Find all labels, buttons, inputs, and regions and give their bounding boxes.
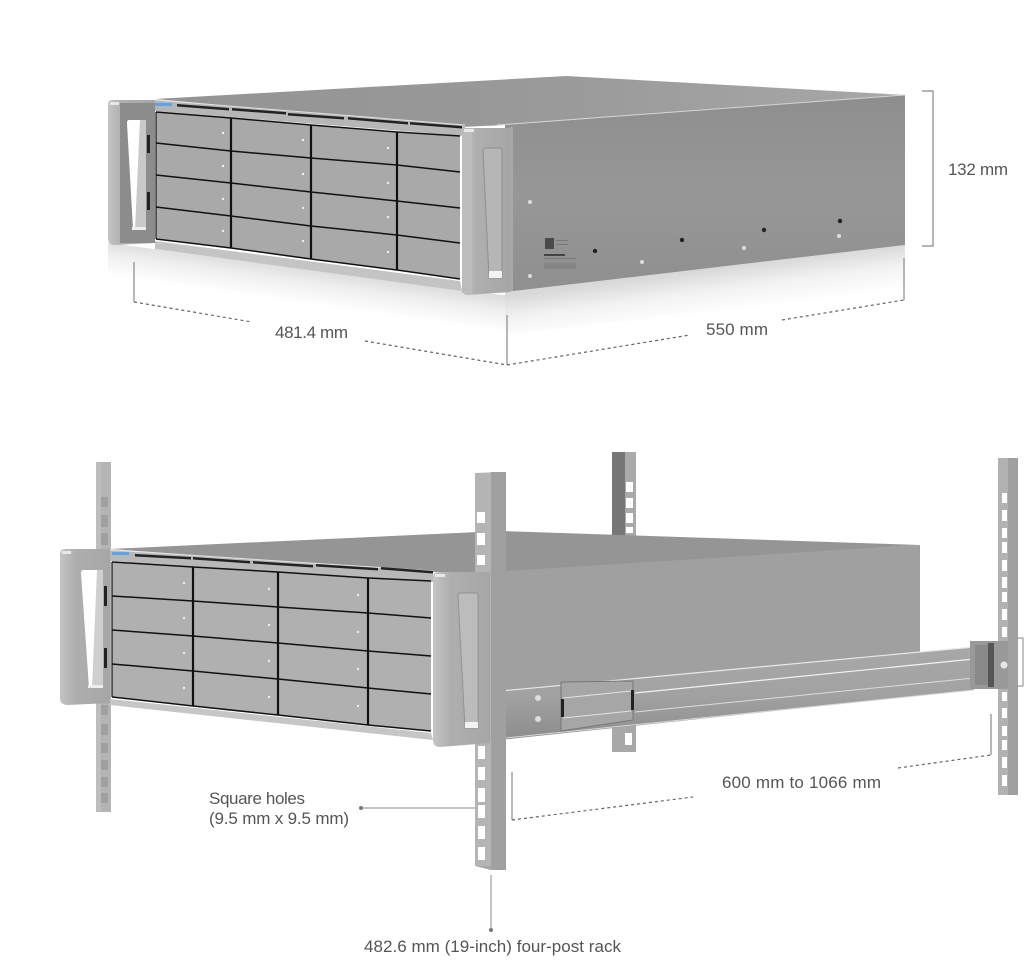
dimension: rail range bbox=[512, 714, 991, 820]
label: 600 mm to 1066 mm: 600 mm to 1066 mm bbox=[722, 773, 881, 792]
label: rack type: 482.6 mm (19-inch) four-post rack bbox=[364, 937, 622, 956]
left handle ear bbox=[60, 549, 110, 705]
right handle ear bbox=[462, 127, 513, 295]
label: 550 mm: 550 mm bbox=[706, 320, 768, 339]
right rear post bbox=[998, 458, 1018, 795]
side screws and ports bbox=[528, 200, 842, 278]
rear left post bbox=[96, 462, 111, 812]
top face bbox=[155, 76, 905, 127]
rail assembly bbox=[490, 647, 974, 741]
bottom front lip bbox=[155, 241, 462, 291]
label: square holes: Square holes bbox=[209, 789, 305, 808]
side face bbox=[490, 545, 920, 700]
rear centre post bbox=[612, 452, 636, 752]
vent strip bbox=[110, 550, 433, 582]
label: 481.4 mm: 481.4 mm bbox=[275, 323, 348, 342]
top edge highlight bbox=[497, 95, 905, 125]
label: 132 mm: 132 mm bbox=[948, 160, 1008, 179]
callout: square holes bbox=[209, 789, 475, 828]
regulatory label bbox=[544, 238, 576, 269]
drive bays bbox=[112, 562, 431, 731]
server: top view with dimensions bbox=[108, 76, 905, 335]
rear post stub with holes bbox=[612, 725, 636, 752]
slider carriage bbox=[561, 681, 633, 731]
dimension: height bbox=[922, 91, 1008, 246]
side face bbox=[505, 95, 905, 292]
floor reflection: side bbox=[505, 245, 905, 335]
rear rail bracket bbox=[970, 638, 1023, 689]
front right post bbox=[475, 472, 506, 870]
label: hole size: (9.5 mm x 9.5 mm) bbox=[209, 809, 349, 828]
dimension: width bbox=[134, 262, 507, 365]
drive bays bbox=[156, 112, 460, 279]
top face bbox=[110, 531, 920, 572]
right handle ear bbox=[433, 572, 490, 747]
callout: rack width bbox=[364, 875, 622, 956]
dimension: depth bbox=[507, 258, 904, 365]
server: installed in rack bbox=[60, 452, 1023, 870]
bottom front lip bbox=[110, 699, 433, 740]
floor reflection: front bbox=[108, 243, 510, 335]
left handle ear bbox=[108, 100, 155, 245]
vent strip bbox=[155, 100, 465, 136]
rail screws bbox=[535, 695, 541, 701]
